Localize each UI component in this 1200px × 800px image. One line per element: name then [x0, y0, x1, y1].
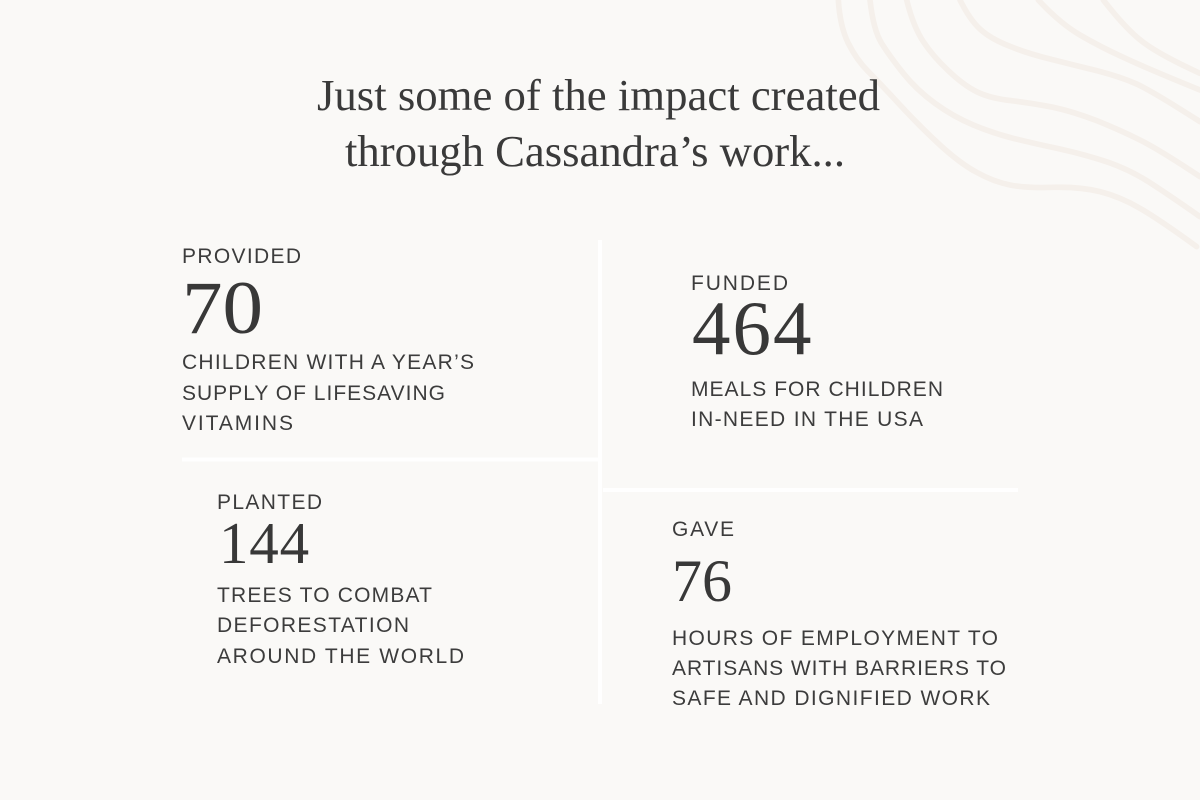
description: trees [217, 584, 464, 668]
label: gave: GAVE [672, 518, 734, 541]
title: through Cassandra’s work... [345, 127, 845, 176]
description: trees: AROUND THE WORLD [217, 645, 464, 668]
description: vitamins: VITAMINS [182, 412, 293, 435]
description: employment [672, 627, 1006, 710]
label: planted: PLANTED [217, 491, 322, 514]
description: vitamins: SUPPLY OF LIFESAVING [182, 382, 445, 405]
decorative wavy lines, top right [838, 0, 1200, 247]
number: 70: 70 [182, 267, 263, 350]
description: meals [691, 378, 943, 431]
number: 464: 464 [692, 285, 814, 371]
panel: planted [217, 491, 464, 668]
number: 76: 76 [672, 548, 732, 614]
description: employment: SAFE AND DIGNIFIED WORK [672, 687, 990, 710]
description: employment: HOURS OF EMPLOYMENT TO [672, 627, 998, 650]
description: employment: ARTISANS WITH BARRIERS TO [672, 657, 1006, 680]
panel: funded [691, 272, 943, 431]
panel: provided [182, 245, 474, 435]
label: funded: FUNDED [691, 272, 788, 295]
description: trees: DEFORESTATION [217, 614, 409, 637]
description: trees: TREES TO COMBAT [217, 584, 432, 607]
title: Just some of the impact created [317, 71, 880, 120]
number: 144: 144 [219, 510, 310, 576]
title [317, 71, 880, 176]
label: provided: PROVIDED [182, 245, 301, 268]
description: meals: IN-NEED IN THE USA [691, 408, 923, 431]
description: vitamins: CHILDREN WITH A YEAR’S [182, 351, 474, 374]
panel: gave [672, 518, 1006, 710]
dividers [182, 240, 1018, 704]
description: vitamins [182, 351, 474, 435]
description: meals: MEALS FOR CHILDREN [691, 378, 943, 401]
